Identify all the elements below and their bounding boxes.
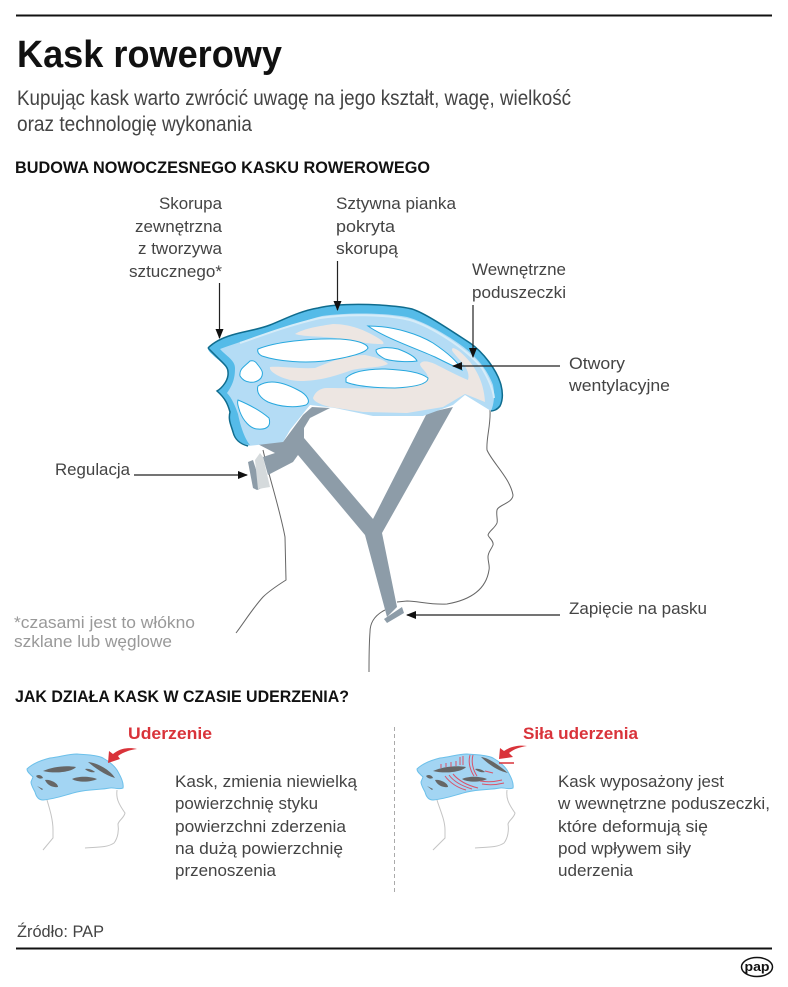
inner padding foam xyxy=(270,324,485,413)
helmet body xyxy=(208,304,502,446)
heading: how it works: JAK DZIAŁA KASK W CZASIE UDERZENIA? xyxy=(15,687,349,706)
label: strap buckle: Zapięcie na pasku xyxy=(569,599,707,618)
label: vents: Otwory xyxy=(569,354,626,373)
description: w wewnętrzne poduszeczki, xyxy=(557,794,770,813)
label: outer shell: Skorupa xyxy=(159,194,223,213)
label: outer shell: z tworzywa xyxy=(138,239,223,258)
title: Kask rowerowy xyxy=(17,34,282,76)
icon: small head xyxy=(433,790,515,850)
description: uderzenia xyxy=(558,861,634,880)
footnote xyxy=(14,613,195,651)
label: vents xyxy=(453,354,670,395)
head outline xyxy=(236,410,513,672)
label: outer shell: sztucznego* xyxy=(129,262,222,281)
label: outer shell xyxy=(129,194,223,338)
description: Kask wyposażony jest xyxy=(558,772,724,791)
description: pod wpływem siły xyxy=(558,839,692,858)
label: inner pads: poduszeczki xyxy=(472,283,566,302)
panel: impact force xyxy=(417,724,770,880)
label: rigid foam: Sztywna pianka xyxy=(336,194,457,213)
helmet outer shell xyxy=(208,304,502,445)
diagram: helmet on head xyxy=(208,304,513,672)
chin strap xyxy=(248,407,453,623)
label: rigid foam: pokryta xyxy=(336,217,396,236)
logo: pap: pap xyxy=(744,959,770,974)
force label: Siła uderzenia xyxy=(523,724,639,743)
logo: pap xyxy=(742,958,772,976)
icon: red arrow xyxy=(108,748,137,763)
icon: small head xyxy=(43,790,125,850)
vent openings xyxy=(238,326,462,429)
icon: adjuster xyxy=(255,453,270,489)
description: powierzchni zderzenia xyxy=(175,817,347,836)
description: które deformują się xyxy=(558,817,708,836)
label: inner pads: Wewnętrzne xyxy=(472,260,566,279)
icon: small helmet xyxy=(27,754,123,800)
icon: red arrow xyxy=(499,746,527,759)
heading: helmet construction: BUDOWA NOWOCZESNEGO KASKU ROWEROWEGO xyxy=(15,158,430,177)
footnote: *czasami jest to włókno xyxy=(14,613,195,632)
source: Źródło: PAP xyxy=(17,922,104,941)
buckle xyxy=(384,607,404,623)
description: na dużą powierzchnię xyxy=(175,839,343,858)
footnote: szklane lub węglowe xyxy=(14,632,172,651)
label: adjustment: Regulacja xyxy=(55,460,131,479)
panel: impact xyxy=(27,724,358,880)
subtitle xyxy=(17,87,571,136)
description xyxy=(557,772,770,880)
label: rigid foam xyxy=(336,194,457,310)
label: outer shell: zewnętrzna xyxy=(135,217,223,236)
description: Kask, zmienia niewielką xyxy=(175,772,358,791)
subtitle: oraz technologię wykonania xyxy=(17,113,252,136)
label: inner pads xyxy=(472,260,566,357)
description xyxy=(175,772,358,880)
label: rigid foam: skorupą xyxy=(336,239,399,258)
label: vents: wentylacyjne xyxy=(568,376,670,395)
description: powierzchnię styku xyxy=(175,794,318,813)
description: przenoszenia xyxy=(175,861,277,880)
subtitle: Kupując kask warto zwrócić uwagę na jego kształt, wagę, wielkość xyxy=(17,87,571,110)
icon: small helmet with force lines xyxy=(417,754,513,800)
impact label: Uderzenie xyxy=(128,724,212,743)
